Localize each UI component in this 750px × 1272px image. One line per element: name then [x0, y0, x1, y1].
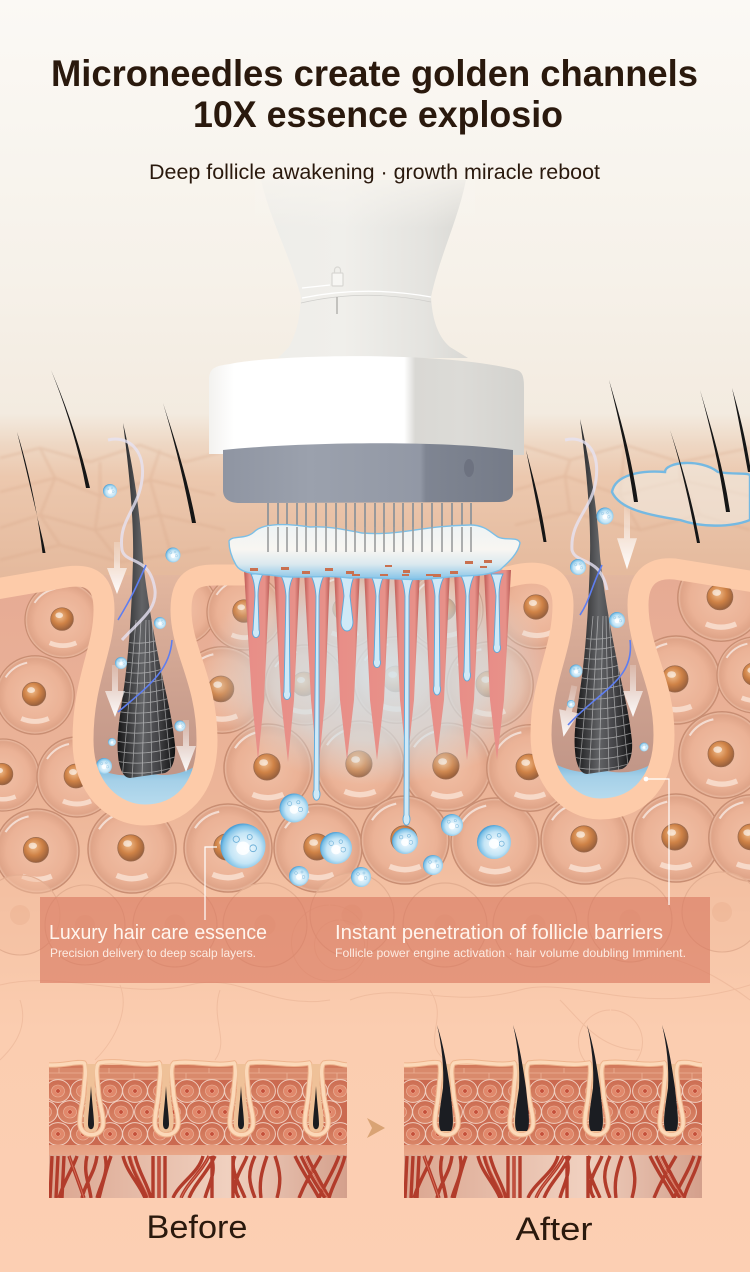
pins [268, 503, 471, 553]
overlay pins [268, 527, 471, 552]
panel: after [388, 1025, 707, 1198]
needle array [244, 570, 511, 825]
faded lower cells [0, 872, 750, 967]
surface hairs [17, 370, 750, 553]
callout: follicle [335, 922, 686, 960]
dermis layer [0, 569, 750, 1272]
essence basin [94, 766, 196, 808]
subtitle: Deep follicle awakening · growth miracle reboot [149, 161, 600, 184]
essence droplets [96, 484, 186, 774]
follicle wall [505, 569, 750, 809]
grey base [223, 443, 513, 503]
callout leader: follicle [644, 777, 669, 905]
callout: follicle: Follicle power engine activation · hair volume doubling Imminent. [335, 946, 686, 960]
follicle wall [0, 575, 250, 815]
faint line art [0, 905, 750, 1074]
microneedle device [209, 180, 524, 553]
right follicle [505, 419, 750, 809]
callout: essence [49, 922, 267, 960]
follicle interior [541, 575, 664, 809]
flow arrows [105, 542, 196, 772]
callout leader: essence [205, 847, 217, 920]
head housing [209, 356, 524, 455]
label: before: Before [146, 1209, 248, 1245]
energy swirl [108, 439, 172, 712]
callout: essence: Precision delivery to deep scalp layers. [50, 946, 256, 960]
skin cells [0, 555, 750, 893]
before hairs [88, 1086, 319, 1129]
title: Microneedles create golden channels [51, 53, 698, 94]
arrow: before to after [367, 1118, 385, 1138]
essence basin [553, 763, 653, 802]
caption band [40, 897, 710, 983]
flow arrows [554, 507, 643, 739]
after hairs [437, 1025, 678, 1131]
left follicle [0, 423, 250, 815]
big hair [112, 423, 178, 780]
neck fade [255, 180, 475, 240]
scalp skin texture [0, 445, 750, 562]
label: after: After [516, 1211, 593, 1247]
big hair [569, 419, 635, 776]
collar and lock mark [301, 267, 431, 314]
panel: before [33, 1062, 352, 1198]
callout: follicle: Instant penetration of follicle barriers [335, 922, 663, 944]
title: 10X essence explosio [193, 94, 563, 135]
callout: essence: Luxury hair care essence [49, 922, 267, 944]
essence blob [229, 525, 520, 579]
blue glow around needles [203, 555, 553, 785]
essence cloud top right [612, 463, 750, 526]
title [51, 53, 698, 135]
essence drips [251, 574, 503, 825]
energy swirl [565, 439, 630, 725]
follicle interior [83, 575, 207, 815]
essence droplets [567, 508, 648, 752]
handle neck [261, 180, 468, 358]
large essence bubbles [220, 794, 511, 887]
side button [464, 459, 474, 477]
red flecks [250, 560, 492, 577]
